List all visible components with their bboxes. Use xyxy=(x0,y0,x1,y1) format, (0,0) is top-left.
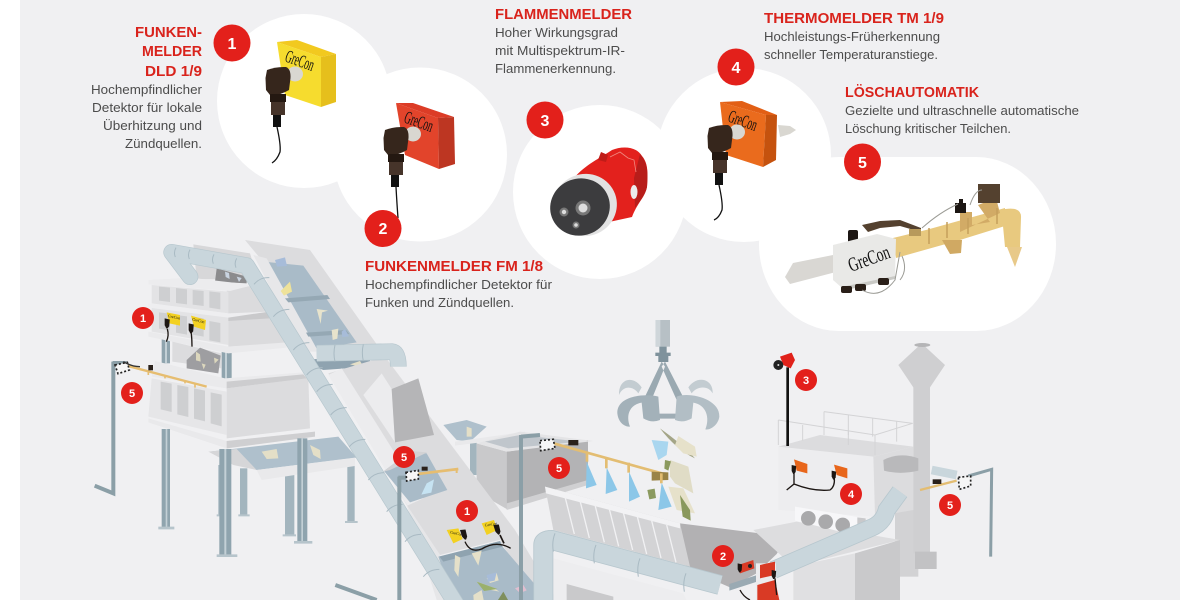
number badge 1 xyxy=(214,24,250,62)
number badge 5: 5 xyxy=(858,155,867,172)
small badges on machinery: 4 xyxy=(848,489,855,501)
text: Flammenmelder: Hoher Wirkungsgrad xyxy=(495,25,618,40)
small badges on machinery: 5 xyxy=(129,388,135,400)
plant building and chimney xyxy=(729,343,945,600)
small badges on machinery: 5 xyxy=(947,500,953,512)
text: Löschautomatik: LÖSCHAUTOMATIK xyxy=(845,84,980,101)
text: Funkenmelder DLD 1/9: Detektor für lokale xyxy=(92,100,202,115)
small badges on machinery: 2 xyxy=(720,551,726,563)
mini spark detectors incline: GreCon xyxy=(484,521,498,528)
device 1: spark detector DLD 1/9 xyxy=(266,40,336,163)
text: Funkenmelder DLD 1/9: MELDER xyxy=(142,44,203,60)
text: Thermomelder TM 1/9: Hochleistungs-Früherkennung xyxy=(764,29,940,44)
number badge 4: 4 xyxy=(732,60,741,77)
text: Thermomelder TM 1/9: schneller Temperaturanstiege. xyxy=(764,47,938,62)
text: Funkenmelder DLD 1/9: Hochempfindlicher xyxy=(91,82,203,97)
mini spark detectors incline xyxy=(447,520,511,550)
storage tub xyxy=(477,432,593,510)
gripper claw xyxy=(617,320,719,430)
mini spark detectors silo: GreCon xyxy=(192,316,205,324)
inclined conveyor xyxy=(172,240,557,600)
text: Flammenmelder xyxy=(495,7,633,76)
device 5: automatic extinguisher: GreCon xyxy=(845,241,893,276)
text: Löschautomatik xyxy=(845,84,1079,136)
text: Funkenmelder DLD 1/9: Überhitzung und xyxy=(103,118,202,133)
device 1: spark detector DLD 1/9: GreCon xyxy=(282,47,317,76)
text: Thermomelder TM 1/9 xyxy=(764,11,944,62)
text: Funkenmelder FM 1/8: Hochempfindlicher Detektor für xyxy=(365,277,553,292)
number badge 1: 1 xyxy=(228,36,237,53)
device 2: spark detector FM 1/8: GreCon xyxy=(401,108,436,137)
support poles xyxy=(95,362,540,600)
text: Löschautomatik: Gezielte und ultraschnelle automatische xyxy=(845,103,1079,118)
right mini extinguisher and pole xyxy=(920,469,992,557)
number badge 2 xyxy=(364,210,402,247)
small badges on machinery: 5 xyxy=(401,452,407,464)
number badge 4 xyxy=(718,48,754,86)
device 4: thermal detector TM 1/9 xyxy=(708,101,796,220)
mini thermal detectors xyxy=(787,459,847,490)
white bubbles behind detectors xyxy=(217,14,1056,331)
small badges on machinery: 1 xyxy=(464,506,470,518)
device 5: automatic extinguisher xyxy=(785,184,1022,293)
machinery: grab, shredder and plant section xyxy=(540,320,992,600)
falling material and spray bar xyxy=(540,428,697,521)
small badges on machinery xyxy=(121,307,961,567)
small badges on machinery: 5 xyxy=(556,463,562,475)
machinery: conveyor and silo section xyxy=(95,240,593,600)
small badges on machinery: 3 xyxy=(803,375,809,387)
text: Thermomelder TM 1/9: THERMOMELDER TM 1/9 xyxy=(764,11,944,27)
number badge 3: 3 xyxy=(541,113,550,130)
text: Funkenmelder DLD 1/9: Zündquellen. xyxy=(125,136,202,151)
incline lower body xyxy=(328,357,515,555)
device 3: flame detector xyxy=(542,148,647,245)
lower silo xyxy=(148,361,315,557)
flame detector mini on pole xyxy=(773,353,795,446)
text: Flammenmelder: mit Multispektrum-IR- xyxy=(495,43,625,58)
silo tower xyxy=(148,244,287,380)
number badge 2: 2 xyxy=(379,221,388,238)
number badge 5 xyxy=(844,144,881,180)
text: Funkenmelder DLD 1/9: FUNKEN- xyxy=(135,25,202,41)
mini spark detectors silo: GreCon xyxy=(167,313,181,321)
device 4: thermal detector TM 1/9: GreCon xyxy=(725,107,760,136)
text: Funkenmelder DLD 1/9: DLD 1/9 xyxy=(145,64,202,80)
mini spark detectors silo xyxy=(165,312,206,347)
mini extinguisher left xyxy=(115,362,207,388)
device 2: spark detector FM 1/8 xyxy=(384,103,455,218)
text: Funkenmelder FM 1/8: Funken und Zündquellen. xyxy=(365,295,514,310)
mini extinguisher incline xyxy=(406,467,458,481)
number badge 3 xyxy=(526,102,564,138)
left rail pipes xyxy=(172,252,457,600)
mini detectors red xyxy=(738,560,779,600)
mini spark detectors incline: GreCon xyxy=(450,529,463,537)
text: Flammenmelder: Flammenerkennung. xyxy=(495,61,616,76)
text: Funkenmelder FM 1/8 xyxy=(365,259,553,310)
text: Löschautomatik: Löschung kritischer Teilchen. xyxy=(845,121,1011,136)
text: Funkenmelder FM 1/8: FUNKENMELDER FM 1/8 xyxy=(365,259,543,275)
small badges on machinery: 1 xyxy=(140,313,146,325)
back conveyor and legs xyxy=(208,420,525,536)
pipe and shredder xyxy=(543,487,787,600)
text: Funkenmelder DLD 1/9 xyxy=(91,25,203,151)
text: Flammenmelder: FLAMMENMELDER xyxy=(495,7,633,23)
